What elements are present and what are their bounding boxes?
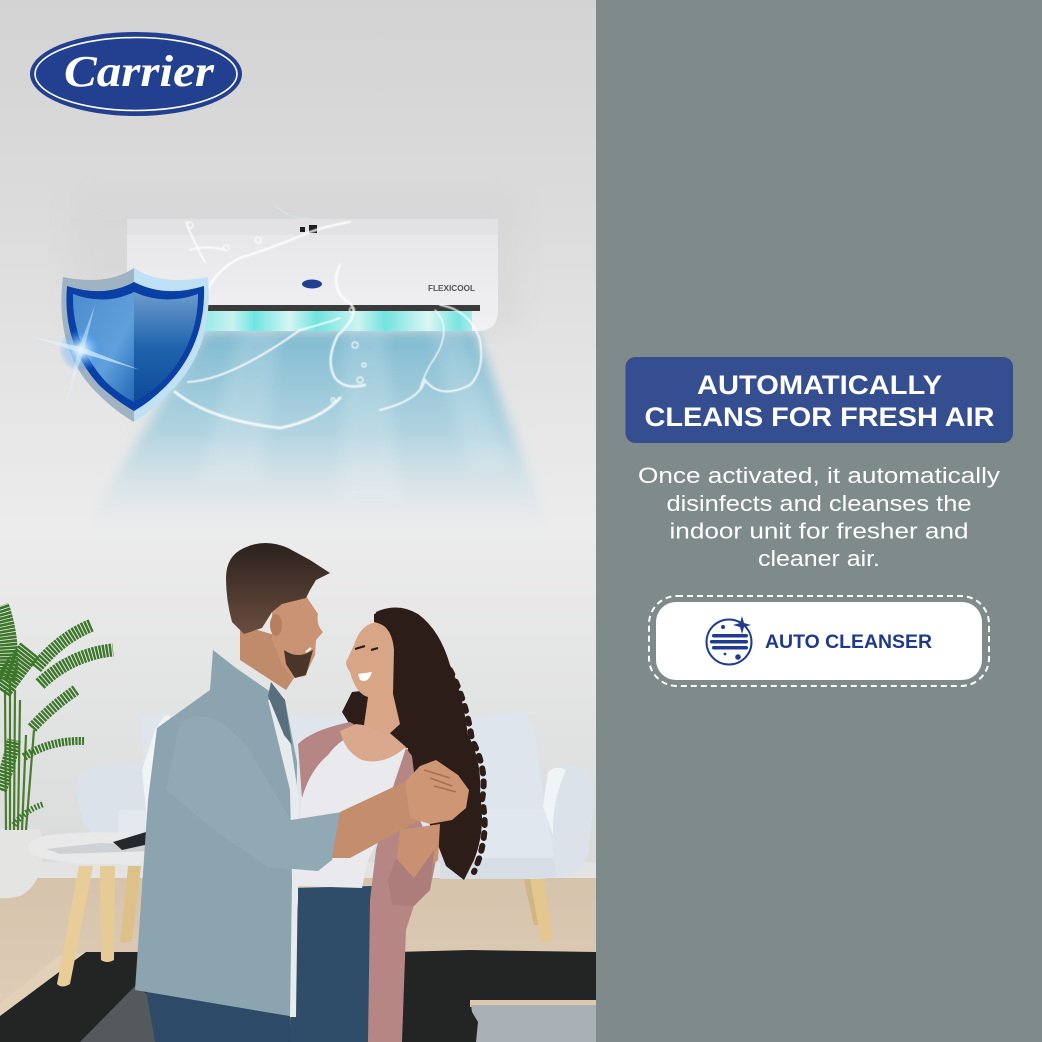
shield blue border <box>66 282 204 411</box>
man ear <box>270 614 282 636</box>
feature badge: AUTO CLEANSER <box>765 632 932 653</box>
baseboard <box>38 862 596 878</box>
shield right face <box>134 292 198 402</box>
woman forearm <box>397 824 440 878</box>
side table <box>41 832 146 986</box>
sofa seat <box>475 816 554 858</box>
sofa right arm <box>550 766 594 862</box>
shield outer rim <box>61 268 209 422</box>
man <box>135 543 469 1042</box>
air flow <box>80 331 552 535</box>
woman cardigan <box>298 722 436 1042</box>
man sleeve <box>290 812 340 871</box>
body text: Once activated, it automatically <box>638 463 1000 488</box>
panel: feature description <box>596 0 1042 1042</box>
woman face <box>346 622 400 735</box>
Carrier logo <box>30 32 242 116</box>
man shirt <box>135 650 297 1017</box>
woman top <box>295 730 408 888</box>
shirt open placket <box>268 700 299 1017</box>
rug <box>0 950 596 1042</box>
man neck <box>240 630 294 690</box>
air conditioner <box>127 219 498 331</box>
panel background <box>596 0 1042 1042</box>
woman chest <box>340 724 406 761</box>
logo inner ring <box>35 38 237 110</box>
body text <box>638 463 1000 571</box>
body text: disinfects and cleanses the <box>666 491 972 516</box>
plant pot <box>0 838 42 898</box>
woman hair <box>342 607 482 880</box>
man hair <box>226 543 330 634</box>
sofa base <box>440 858 566 879</box>
cyan light band <box>200 311 472 331</box>
shield icon <box>61 268 209 422</box>
heading banner: CLEANS FOR FRESH AIR <box>644 402 994 432</box>
plant <box>0 606 113 898</box>
AC vent <box>200 305 480 311</box>
woman <box>290 607 485 1042</box>
logo wordmark: Carrier <box>64 47 215 96</box>
AC model: FLEXICOOL <box>428 284 475 293</box>
sofa back <box>140 712 548 830</box>
clasped hands <box>405 760 469 824</box>
man undershirt <box>281 694 298 918</box>
cushion <box>142 716 170 816</box>
AC display <box>300 225 317 233</box>
water splash <box>175 205 481 428</box>
table top <box>41 832 119 864</box>
shield left face <box>73 292 134 402</box>
sofa legs <box>523 876 538 925</box>
table legs <box>120 866 141 943</box>
body text: indoor unit for fresher and <box>670 518 968 544</box>
heading banner <box>626 357 1013 443</box>
feature badge <box>649 596 989 686</box>
panel: room photo <box>0 0 596 1042</box>
AC logo <box>302 280 322 288</box>
sofa <box>75 712 594 942</box>
body text: cleaner air. <box>758 546 880 571</box>
heading banner: AUTOMATICALLY <box>697 370 942 400</box>
man face <box>272 590 323 678</box>
wooden floor <box>0 878 596 1025</box>
wall shade behind AC <box>70 190 520 330</box>
light flare <box>30 305 140 405</box>
man forearm <box>332 782 420 858</box>
woman jeans <box>290 886 376 1042</box>
logo oval <box>30 32 242 116</box>
man jeans <box>146 990 291 1042</box>
icon: auto cleanser <box>706 616 752 664</box>
wall background <box>0 0 596 880</box>
woman hair front <box>374 613 384 626</box>
sofa left arm <box>75 762 146 832</box>
